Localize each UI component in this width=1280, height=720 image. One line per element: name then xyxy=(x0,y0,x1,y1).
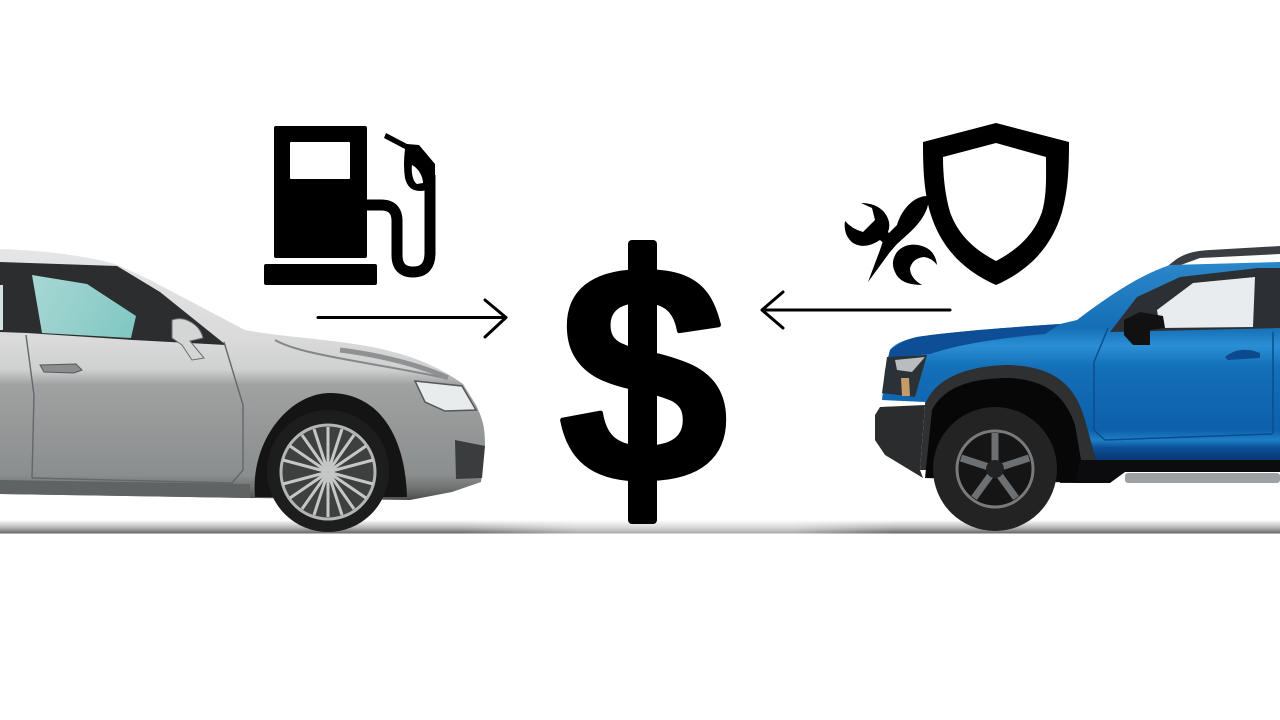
truck wheel well xyxy=(925,378,1085,483)
truck hood xyxy=(888,324,1060,358)
truck side window xyxy=(1157,277,1255,328)
screwdriver xyxy=(868,196,928,282)
lower wrench xyxy=(893,245,937,285)
truck door handle xyxy=(1225,350,1260,360)
sedan window frame xyxy=(0,262,226,345)
truck window frame xyxy=(1110,268,1280,332)
arrow: car to dollar xyxy=(318,300,506,337)
truck sill xyxy=(1075,460,1280,483)
sedan rear window sliver xyxy=(0,285,3,330)
fuel nozzle xyxy=(384,133,435,191)
sedan wheel well xyxy=(255,393,407,497)
shield xyxy=(923,123,1069,285)
truck wheel xyxy=(933,407,1057,531)
truck side step xyxy=(1125,473,1280,483)
sedan door handle xyxy=(40,364,82,373)
sedan lower grille xyxy=(455,440,485,479)
blue pickup truck xyxy=(875,246,1280,531)
sedan headlight xyxy=(415,381,476,411)
truck body xyxy=(882,262,1280,462)
sedan side window xyxy=(32,275,136,338)
ground shadow xyxy=(0,520,1280,535)
sedan door lines and sill xyxy=(0,335,448,498)
fuel hose xyxy=(367,175,430,272)
truck fender flare xyxy=(920,365,1096,483)
icon: dollar sign: $ xyxy=(558,202,728,549)
sedan body xyxy=(0,249,485,500)
truck roof rail xyxy=(1168,246,1280,266)
pump body with screen xyxy=(274,126,367,258)
silver sedan xyxy=(0,249,485,532)
truck grille and lamps xyxy=(882,355,927,397)
arrow: truck to dollar xyxy=(762,292,950,328)
upper wrench xyxy=(845,203,895,247)
icon: shield with tools xyxy=(845,123,1069,285)
truck bumper xyxy=(875,405,925,478)
sedan wheel xyxy=(267,410,389,532)
truck door lines xyxy=(1094,328,1273,440)
truck wing mirror xyxy=(1124,312,1165,345)
pump base xyxy=(264,264,377,285)
icon: fuel pump xyxy=(264,126,435,285)
sedan wing mirror xyxy=(172,319,204,360)
